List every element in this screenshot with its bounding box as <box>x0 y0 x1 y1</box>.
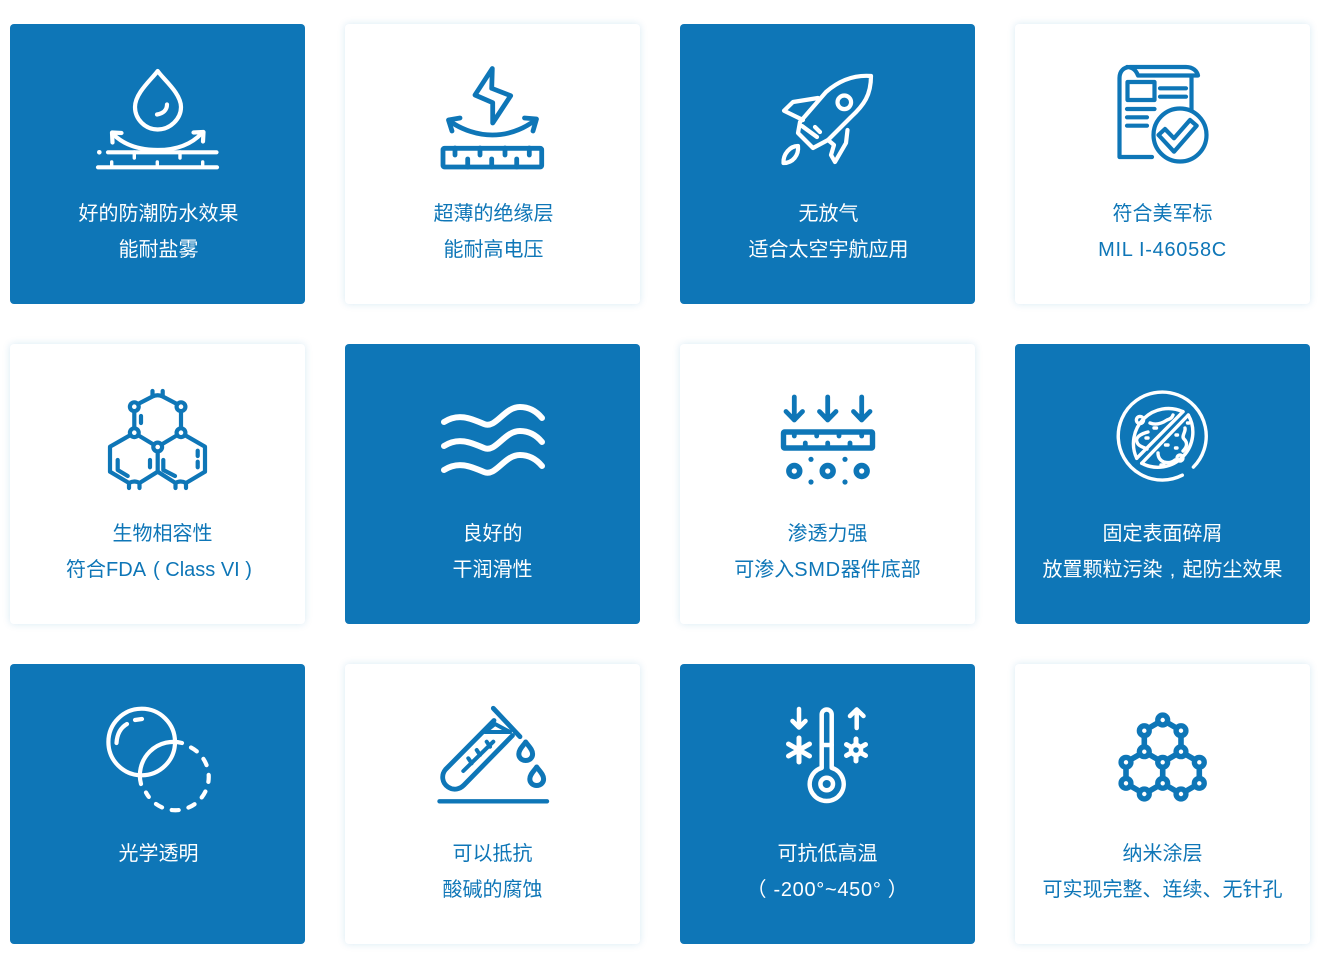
icon: lightning bolt over insulating layer <box>440 66 544 170</box>
panel: moisture protection <box>10 24 305 304</box>
icon: overlapping circles <box>106 706 211 812</box>
text: debris fixation <box>1042 523 1282 581</box>
icon: nano lattice <box>1118 712 1207 802</box>
icon: benzene hexagons <box>108 388 208 490</box>
text: lubricity: 良好的 <box>462 523 522 545</box>
text: debris fixation: 放置颗粒污染 起防尘效果 <box>1042 559 1282 581</box>
panel: temperature resistance <box>680 664 975 944</box>
text: debris fixation: , <box>1170 559 1175 581</box>
text: temperature resistance <box>746 842 908 901</box>
icon: waves <box>441 404 545 476</box>
icon: arrows penetrating layer <box>780 394 876 485</box>
panel: optical transparency <box>10 664 305 944</box>
text: military standard: MIL I-46058C <box>1098 239 1227 261</box>
text: nano coating <box>1042 843 1282 901</box>
text: penetration <box>734 523 921 581</box>
text: corrosion resistance <box>442 842 542 901</box>
text: lubricity: 干润滑性 <box>452 559 532 581</box>
text: ultra-thin insulation: 超薄的绝缘层 <box>434 203 554 225</box>
panel: debris fixation <box>1015 344 1310 624</box>
text: moisture protection: 能耐盐雾 <box>118 239 198 261</box>
text: temperature resistance: （ -200°~450° ） <box>746 879 908 901</box>
panel: lubricity <box>345 344 640 624</box>
text: no outgassing <box>748 203 908 261</box>
text: no outgassing: 无放气 <box>798 203 858 225</box>
text: optical transparency: 光学透明 <box>118 843 198 865</box>
text: no outgassing: 适合太空宇航应用 <box>748 239 908 261</box>
icon: document with check badge <box>1117 64 1209 164</box>
panel: corrosion resistance <box>345 664 640 944</box>
text: temperature resistance: 可抗低高温 <box>778 843 878 865</box>
text: ultra-thin insulation: 能耐高电压 <box>444 239 544 261</box>
text: nano coating: 纳米涂层 <box>1122 843 1202 865</box>
panel: penetration <box>680 344 975 624</box>
text: nano coating: 可实现完整、连续、无针孔 <box>1042 879 1282 901</box>
icon: rocket <box>781 74 874 166</box>
text: ultra-thin insulation <box>434 202 554 261</box>
panel: no outgassing <box>680 24 975 304</box>
text: military standard: 符合美军标 <box>1112 203 1212 225</box>
text: lubricity <box>452 522 532 581</box>
panel: ultra-thin insulation <box>345 24 640 304</box>
text: penetration: 渗透力强 <box>788 523 868 545</box>
icon: water drop on membrane <box>96 68 220 170</box>
panel: military standard <box>1015 24 1310 304</box>
text: biocompatibility <box>66 523 252 581</box>
text: corrosion resistance: 酸碱的腐蚀 <box>442 879 542 901</box>
text: penetration: 可渗入SMD器件底部 <box>734 559 921 581</box>
text: moisture protection: 好的防潮防水效果 <box>78 203 238 225</box>
text: corrosion resistance: 可以抵抗 <box>452 843 532 865</box>
icon: prohibited particles <box>1116 390 1208 482</box>
icon: test tube with drops <box>437 706 550 804</box>
text: military standard <box>1098 203 1227 261</box>
panel: nano coating <box>1015 664 1310 944</box>
text: biocompatibility: 生物相容性 <box>112 523 212 545</box>
text: debris fixation: 固定表面碎屑 <box>1102 523 1222 545</box>
icon: thermometer with snowflake and sun <box>786 706 868 804</box>
text: biocompatibility: 符合FDA ( Class VI ) <box>66 559 252 581</box>
panel: biocompatibility <box>10 344 305 624</box>
text: moisture protection <box>78 203 238 261</box>
